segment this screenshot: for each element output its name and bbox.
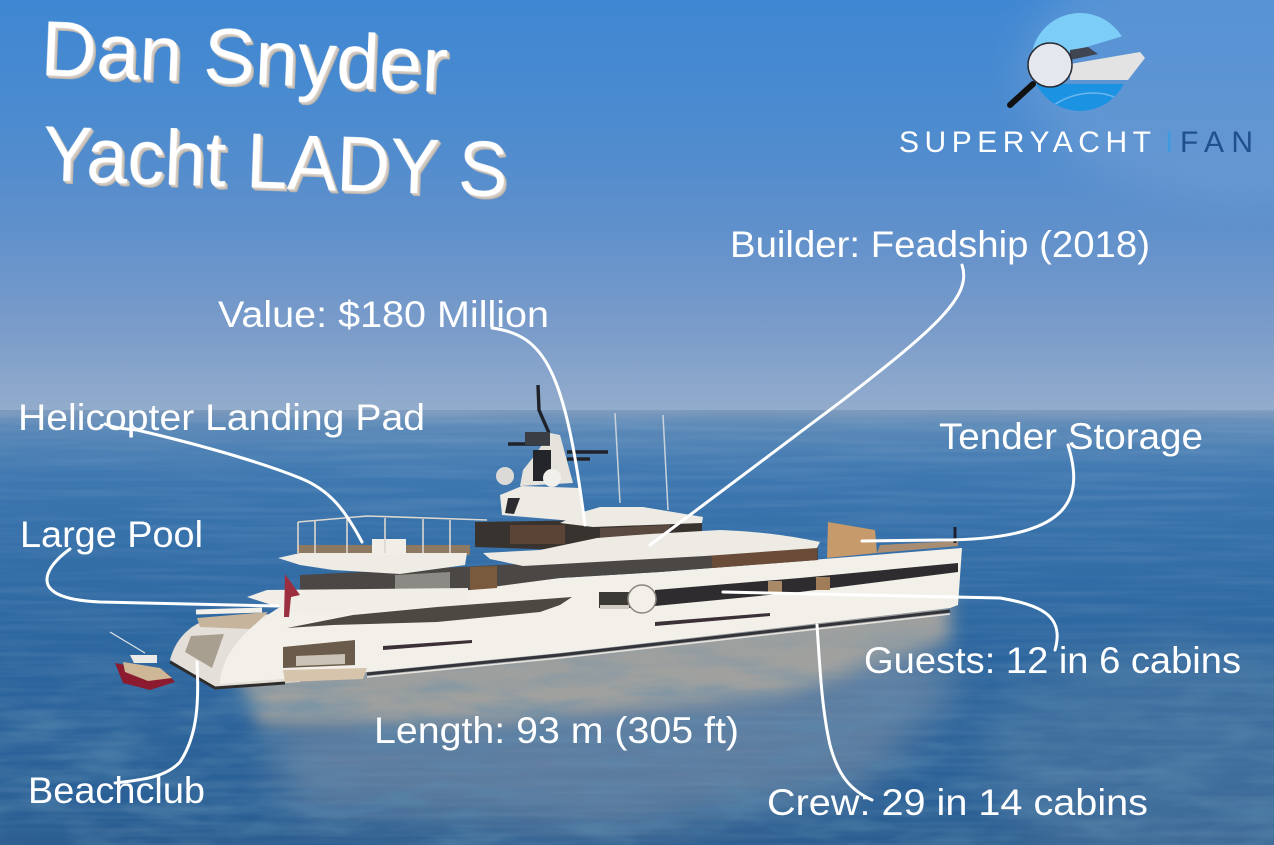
mast and radar arms [508, 385, 608, 459]
label: helicopter pad: Helicopter Landing Pad [18, 397, 425, 438]
label: value: Value: $180 Million [218, 294, 549, 335]
third deck white [483, 530, 820, 566]
logo: Superyacht Fan: FAN [1180, 126, 1253, 159]
mast fin [520, 433, 573, 486]
ensign flag [284, 574, 300, 617]
waterline stripe [367, 611, 950, 674]
roof deck [560, 507, 703, 527]
background: sea [0, 410, 1274, 845]
hull slits [383, 613, 770, 650]
side window and monogram [599, 592, 630, 608]
label: guests: Guests: 12 in 6 cabins [864, 640, 1241, 681]
helicopter pad deck [297, 545, 470, 555]
domes [496, 467, 514, 485]
callout lines [47, 265, 1074, 800]
title: Yacht LADY S [41, 109, 509, 213]
magnifier [1010, 43, 1072, 105]
label: beachclub: Beachclub [28, 770, 205, 811]
label: builder: Builder: Feadship (2018) [730, 224, 1150, 265]
aft swoop deck [247, 588, 468, 615]
main hull [220, 548, 962, 684]
second deck dark band [300, 547, 818, 598]
bridge deck dark [475, 520, 702, 550]
mast house [500, 486, 585, 522]
yacht LADY S [110, 385, 962, 690]
aft window band [287, 597, 572, 628]
tender boat [110, 632, 175, 690]
tender storage hatch [827, 522, 877, 558]
label: length: Length: 93 m (305 ft) [374, 710, 739, 751]
label: tender storage: Tender Storage [939, 416, 1203, 457]
label: crew: Crew: 29 in 14 cabins [767, 782, 1148, 823]
logo: Superyacht Fan: I [1165, 126, 1173, 159]
aft deck [197, 612, 268, 629]
label: large pool: Large Pool [20, 514, 203, 555]
swim platform [283, 668, 367, 682]
stern section [170, 612, 300, 687]
logo badge [1032, 13, 1124, 111]
title: Dan Snyder [39, 4, 450, 109]
logo boat [1070, 52, 1145, 80]
canopy frame [298, 516, 487, 553]
antennas [615, 413, 668, 510]
background: sky [0, 0, 1274, 412]
forward window band [655, 563, 958, 606]
logo: Superyacht Fan [899, 12, 1253, 159]
logo wordmark: SUPERYACHT [899, 126, 1151, 159]
title [39, 4, 509, 213]
beach club opening [283, 640, 355, 668]
